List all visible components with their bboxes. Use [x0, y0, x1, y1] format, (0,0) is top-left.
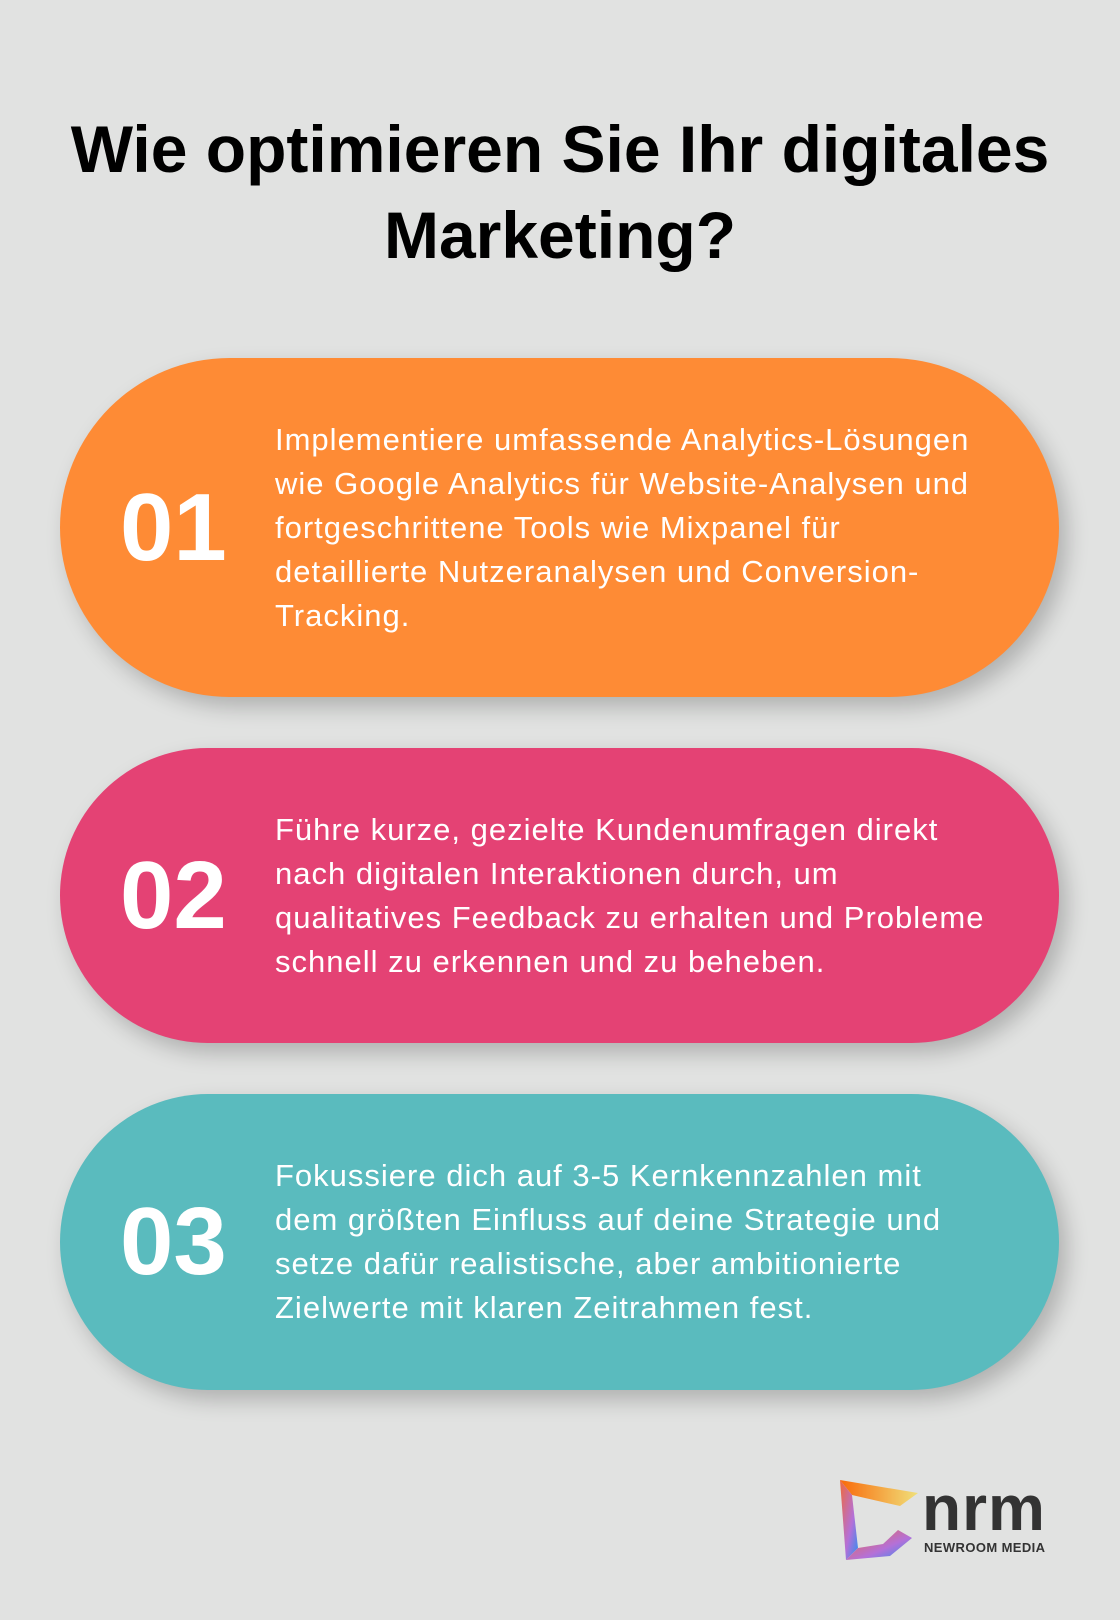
text 03: dem größten Einfluss auf deine Strategie und [275, 1202, 941, 1237]
text 01 [275, 422, 969, 633]
logo text: nrm [922, 1472, 1046, 1544]
number 01: 01 [120, 474, 227, 581]
text 01: Tracking. [275, 598, 410, 633]
logo: NEWROOM MEDIA [924, 1540, 1045, 1555]
number 03: 03 [120, 1188, 227, 1295]
text 03 [275, 1158, 941, 1325]
text 01: detaillierte Nutzeranalysen und Conversion- [275, 554, 919, 589]
text 01: fortgeschrittene Tools wie Mixpanel für [275, 510, 841, 545]
text 03: Zielwerte mit klaren Zeitrahmen fest. [275, 1290, 813, 1325]
text 02: nach digitalen Interaktionen durch, um [275, 856, 839, 891]
text 02: schnell zu erkennen und zu beheben. [275, 944, 825, 979]
text 02 [275, 812, 984, 979]
title [70, 112, 1049, 272]
text 01: Implementiere umfassende Analytics-Lösungen [275, 422, 969, 457]
title: Marketing? [384, 198, 736, 272]
logo [840, 1472, 1046, 1560]
title: Wie optimieren Sie Ihr digitales [71, 112, 1049, 186]
panel: step 02 [60, 748, 1059, 1043]
text 01: wie Google Analytics für Website-Analysen und [275, 466, 969, 501]
number 02: 02 [120, 842, 227, 949]
panel: step 03 [60, 1094, 1059, 1390]
icon: logo mark [840, 1480, 918, 1560]
panel: step 01 [60, 358, 1059, 697]
text 03: setze dafür realistische, aber ambitionierte [275, 1246, 901, 1281]
text 03: Fokussiere dich auf 3-5 Kernkennzahlen mit [275, 1158, 922, 1193]
text 02: qualitatives Feedback zu erhalten und Probleme [275, 900, 984, 935]
text 02: Führe kurze, gezielte Kundenumfragen direkt [275, 812, 938, 847]
